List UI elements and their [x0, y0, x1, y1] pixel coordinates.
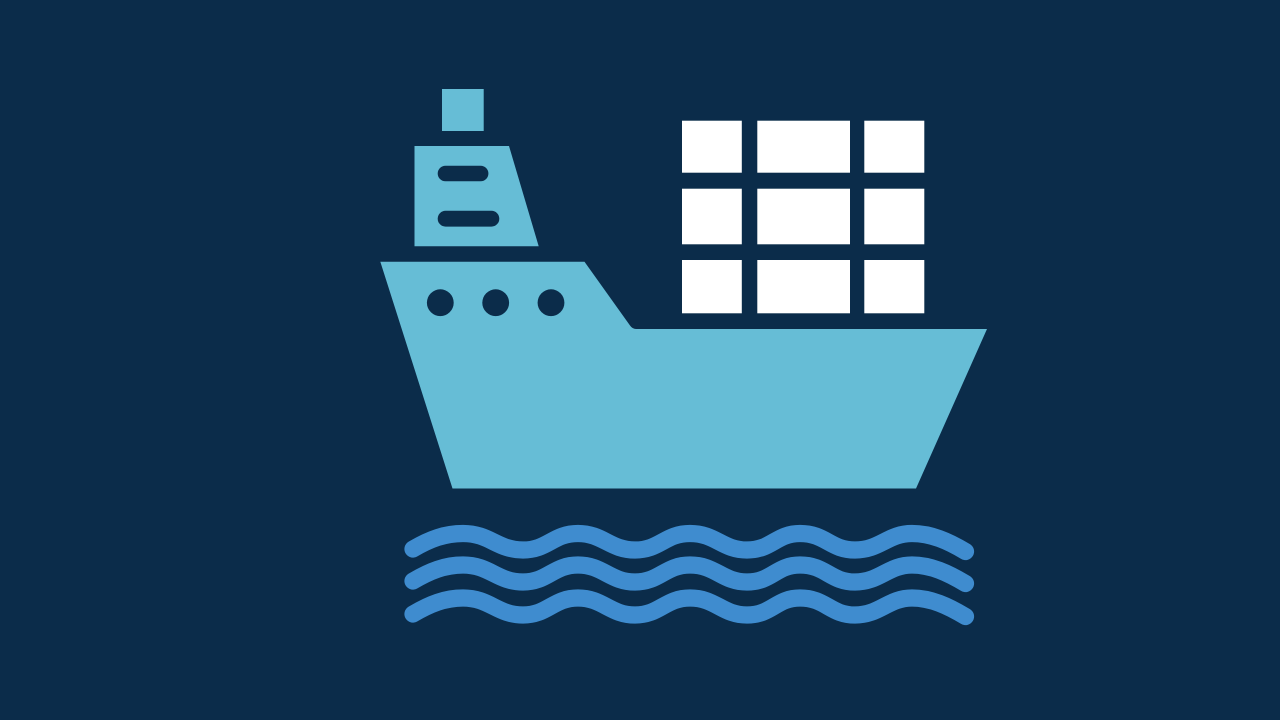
icon: ship bridge — [414, 146, 539, 246]
icon: stacked cargo containers — [682, 121, 924, 313]
icon: ship funnel — [442, 89, 484, 131]
icon: water waves — [413, 534, 966, 616]
icon: ship hull — [380, 262, 987, 488]
